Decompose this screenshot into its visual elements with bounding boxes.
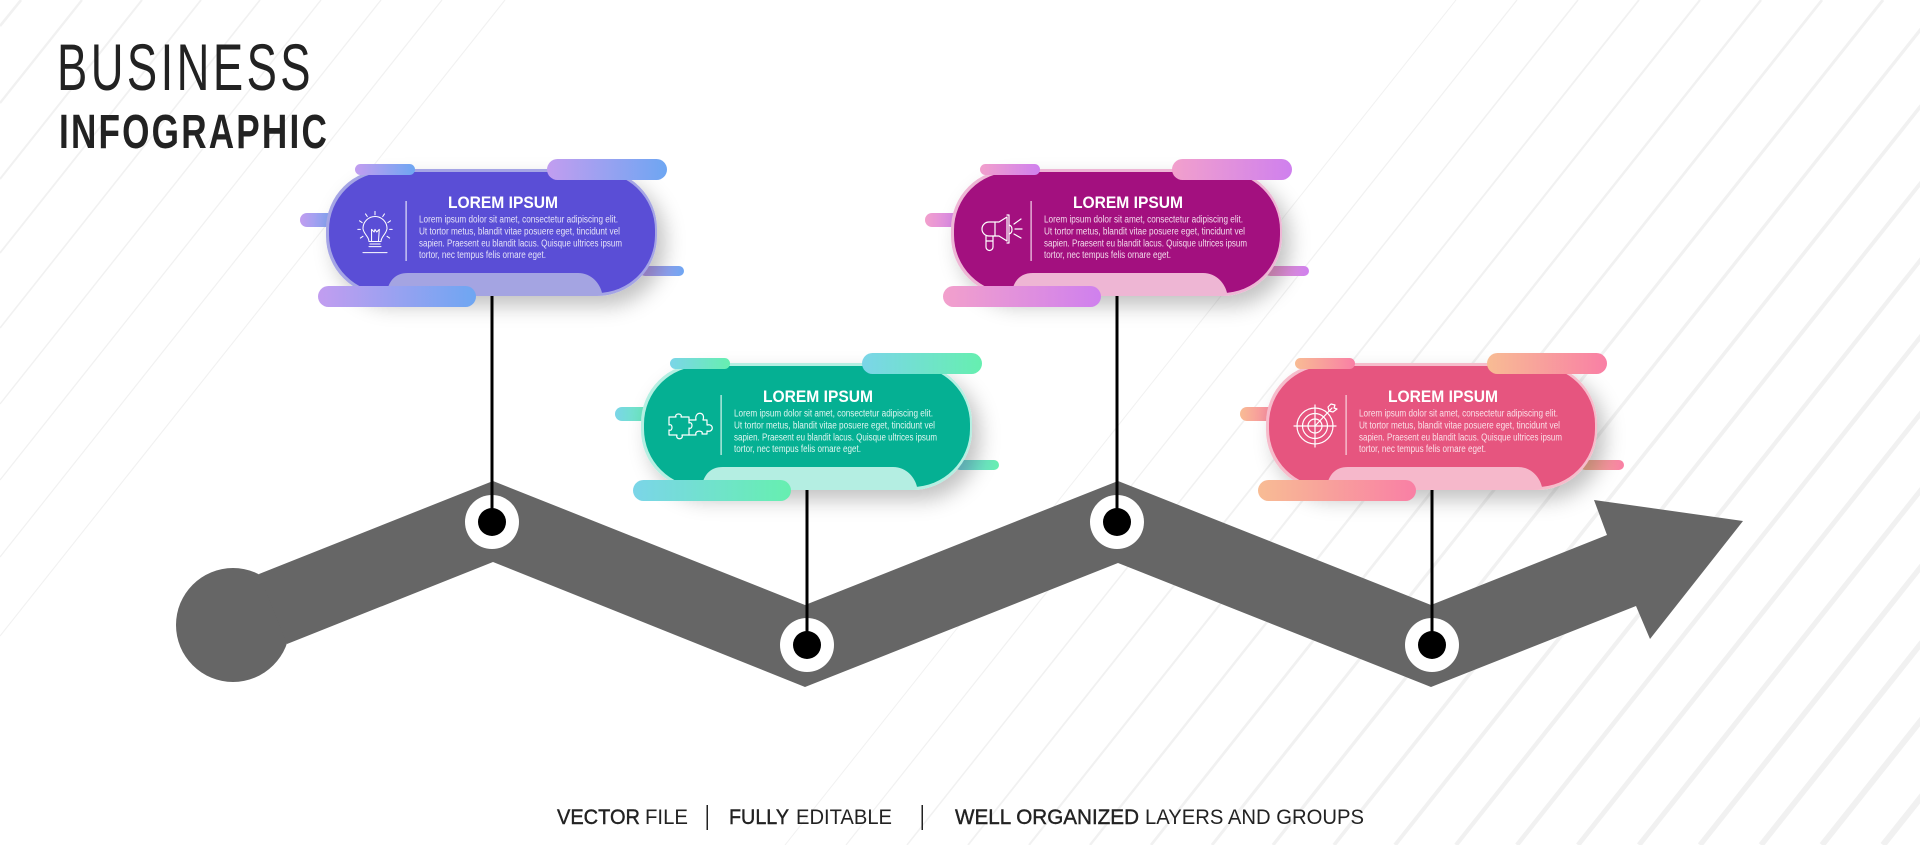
text block: tortor, nec tempus felis ornare eget. (1044, 250, 1171, 261)
timeline marker 4 (1405, 490, 1459, 672)
timeline marker 1 (465, 296, 519, 549)
text block: tortor, nec tempus felis ornare eget. (1359, 444, 1486, 455)
text block: Ut tortor metus, blandit vitae posuere eget, tincidunt vel (1044, 226, 1245, 238)
text block (1359, 408, 1562, 455)
text block: Lorem ipsum dolor sit amet, consectetur adipiscing elit. (419, 214, 618, 226)
footer text: EDITABLE (796, 806, 892, 829)
panel: teal card (615, 353, 999, 501)
icon: target (1294, 404, 1337, 447)
icon: megaphone (982, 215, 1022, 251)
icon: puzzle (669, 413, 712, 439)
title: BUSINESS (57, 30, 314, 104)
text block (734, 408, 937, 455)
text block: tortor, nec tempus felis ornare eget. (419, 250, 546, 261)
panel: purple card (300, 159, 684, 307)
timeline marker 3 (1090, 296, 1144, 549)
text block: Ut tortor metus, blandit vitae posuere eget, tincidunt vel (1359, 420, 1560, 432)
text block: Ut tortor metus, blandit vitae posuere eget, tincidunt vel (734, 420, 935, 432)
footer text: FILE (645, 806, 688, 829)
footer text: FULLY (729, 806, 789, 829)
heading: LOREM IPSUM (1388, 388, 1498, 406)
text block: sapien. Praesent eu blandit lacus. Quisque ultrices ipsum (1359, 432, 1562, 444)
icon: light bulb (358, 211, 392, 253)
text block: Lorem ipsum dolor sit amet, consectetur adipiscing elit. (734, 408, 933, 420)
text block: sapien. Praesent eu blandit lacus. Quisque ultrices ipsum (1044, 238, 1247, 250)
text block: sapien. Praesent eu blandit lacus. Quisque ultrices ipsum (734, 432, 937, 444)
title: INFOGRAPHIC (59, 106, 329, 159)
footer text: WELL ORGANIZED (955, 806, 1139, 829)
zigzag arrow (176, 481, 1743, 687)
text block: Lorem ipsum dolor sit amet, consectetur adipiscing elit. (1359, 408, 1558, 420)
heading: LOREM IPSUM (448, 194, 558, 212)
panel: magenta card (925, 159, 1309, 307)
text block (1044, 214, 1247, 261)
footer text (557, 805, 1364, 830)
footer text: VECTOR (557, 806, 640, 829)
panel: pink card (1240, 353, 1624, 501)
footer text: LAYERS AND GROUPS (1145, 806, 1364, 829)
text block: Lorem ipsum dolor sit amet, consectetur adipiscing elit. (1044, 214, 1243, 226)
heading: LOREM IPSUM (1073, 194, 1183, 212)
text block: tortor, nec tempus felis ornare eget. (734, 444, 861, 455)
heading: LOREM IPSUM (763, 388, 873, 406)
text block: Ut tortor metus, blandit vitae posuere eget, tincidunt vel (419, 226, 620, 238)
text block (419, 214, 622, 261)
title (57, 30, 329, 159)
text block: sapien. Praesent eu blandit lacus. Quisque ultrices ipsum (419, 238, 622, 250)
timeline marker 2 (780, 490, 834, 672)
